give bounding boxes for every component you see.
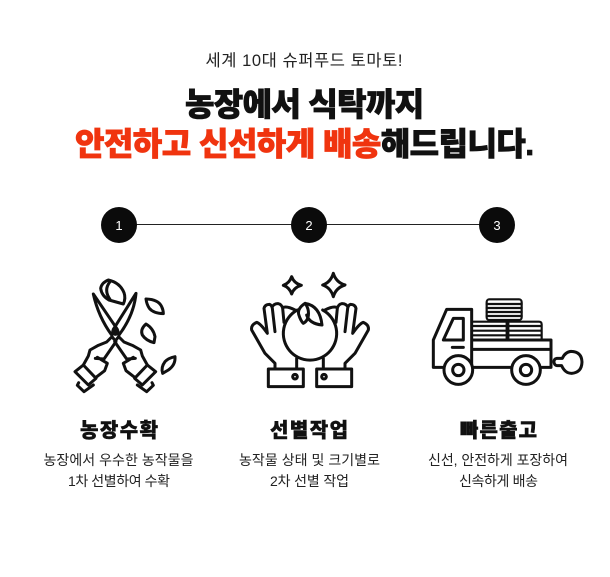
step 1 text xyxy=(44,419,194,489)
step 2 badge: 2 xyxy=(305,218,313,233)
tomato leaves xyxy=(298,303,322,325)
icon: hands holding tomato with sparkles xyxy=(252,273,368,387)
left glove xyxy=(83,337,116,377)
step 1 badge: 1 xyxy=(115,218,123,233)
step 3 badge xyxy=(479,207,515,243)
step 3 text: 신선, 안전하게 포장하여 xyxy=(428,452,568,468)
step 2 badge xyxy=(291,207,327,243)
step 2 text: 선별작업 xyxy=(270,419,348,442)
step 1 text: 농장에서 우수한 농작물을 xyxy=(44,452,194,468)
step 1 text: 1차 선별하여 수확 xyxy=(68,473,170,489)
petal cluster xyxy=(101,280,125,304)
icon: pruning shears and petals xyxy=(75,280,175,392)
step timeline xyxy=(101,207,515,243)
step 3 text xyxy=(428,419,568,489)
falling petals xyxy=(142,299,175,373)
step 1 badge xyxy=(101,207,137,243)
crates xyxy=(473,299,542,340)
title xyxy=(75,86,533,162)
step 2 text: 농작물 상태 및 크기별로 xyxy=(239,452,380,468)
shears blades xyxy=(93,293,136,335)
left cuff xyxy=(268,369,303,387)
step 1 text: 농장수확 xyxy=(80,419,158,442)
truck wheels xyxy=(444,356,540,384)
exhaust puff xyxy=(554,351,582,373)
eyebrow text: 세계 10대 슈퍼푸드 토마토! xyxy=(206,51,402,70)
right hand xyxy=(323,304,368,369)
tomato xyxy=(283,310,337,360)
step 3 text: 빠른출고 xyxy=(460,419,537,442)
title: 안전하고 신선하게 배송해드립니다. xyxy=(75,126,533,162)
step 2 text: 2차 선별 작업 xyxy=(270,473,349,489)
step 3 badge: 3 xyxy=(493,218,501,233)
step 3 text: 신속하게 배송 xyxy=(459,473,538,489)
left hand xyxy=(252,304,297,369)
step 2 text xyxy=(239,419,380,489)
right cuff xyxy=(317,369,352,387)
sparkles xyxy=(283,273,345,297)
truck body xyxy=(433,309,551,367)
right glove xyxy=(115,337,147,377)
icon: delivery truck xyxy=(433,299,582,384)
title: 농장에서 식탁까지 xyxy=(185,86,423,122)
